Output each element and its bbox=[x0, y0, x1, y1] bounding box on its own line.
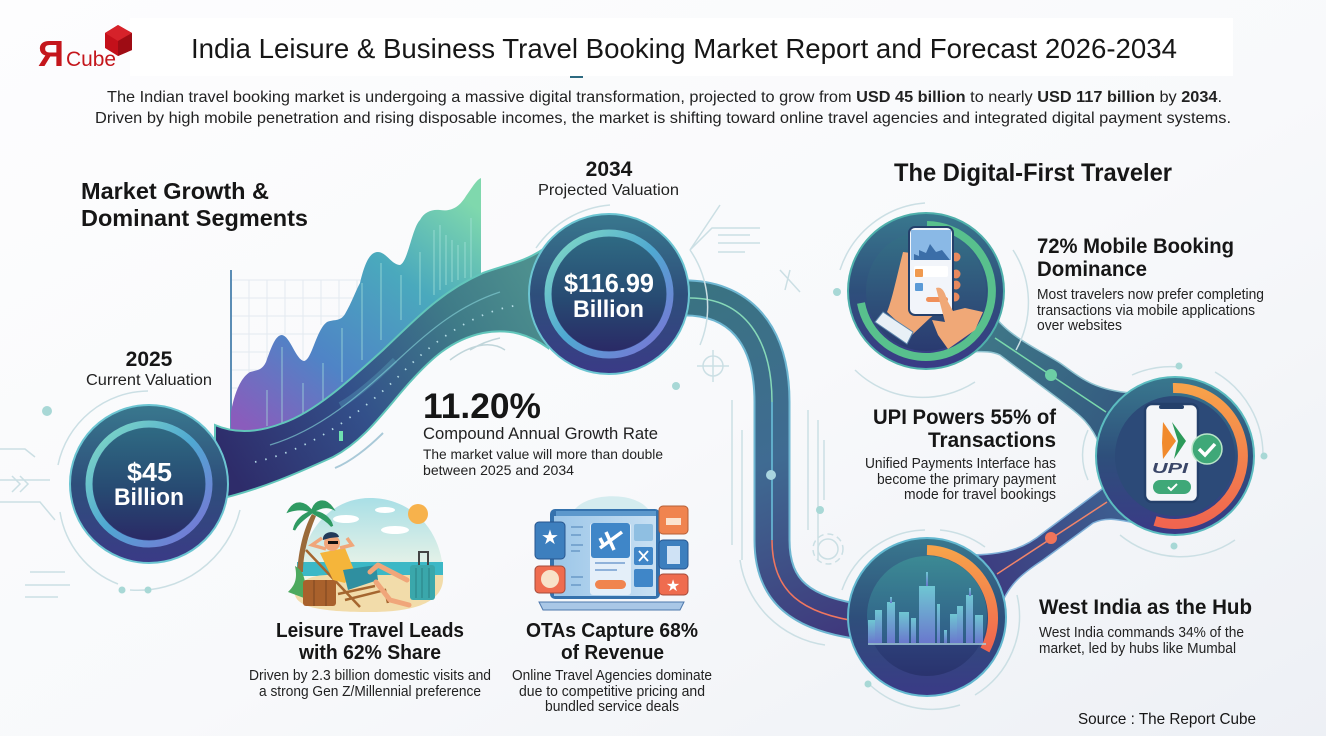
label: $116.99 Billion bbox=[564, 268, 654, 323]
icon: OTA laptop: ★ bbox=[541, 527, 559, 549]
heading: market growth: Dominant Segments bbox=[81, 205, 308, 231]
segment: OTAs: OTAs Capture 68% bbox=[526, 620, 698, 642]
intro text: Driven by high mobile penetration and rising disposable incomes, the market is shifting toward online travel agencies and integrated digital payment systems. bbox=[95, 110, 1231, 127]
logo: RCube: Cube bbox=[66, 48, 116, 71]
icon: beach traveller bbox=[288, 498, 443, 612]
label: $116.99 Billion: Billion bbox=[573, 296, 644, 323]
road: 2025 to 2034 bbox=[215, 248, 548, 500]
text: mobile booking bbox=[1037, 235, 1264, 334]
label: 2025 current valuation: 2025 bbox=[126, 348, 173, 371]
label: $45 Billion: $45 bbox=[127, 457, 172, 487]
text: UPI bbox=[865, 406, 1057, 503]
segment: leisure travel: with 62% Share bbox=[298, 642, 441, 664]
heading: market growth: Market Growth & bbox=[81, 178, 269, 204]
CAGR callout: 11.20% bbox=[423, 387, 541, 426]
text: UPI: Transactions bbox=[928, 429, 1056, 452]
text: West India: West India commands 34% of the bbox=[1039, 625, 1244, 641]
label: 2034 projected valuation bbox=[538, 158, 679, 199]
segment: leisure travel bbox=[249, 620, 491, 700]
segment: OTAs: due to competitive pricing and bbox=[519, 684, 705, 700]
label: 2034 projected valuation: Projected Valuation bbox=[538, 182, 679, 199]
segment: leisure travel: Leisure Travel Leads bbox=[276, 620, 464, 642]
circle: 2025 value bbox=[70, 405, 228, 563]
segment: leisure travel: Driven by 2.3 billion domestic visits and bbox=[249, 668, 491, 684]
logo: RCube: Я bbox=[38, 33, 64, 74]
text: UPI: Unified Payments Interface has bbox=[865, 456, 1056, 472]
text: UPI: UPI Powers 55% of bbox=[873, 406, 1057, 429]
road: 2034 to West India bbox=[680, 298, 862, 622]
circle: UPI icon: UPI bbox=[1152, 460, 1189, 477]
label: $116.99 Billion: $116.99 bbox=[564, 268, 654, 298]
label: 2034 projected valuation: 2034 bbox=[586, 158, 633, 181]
text: UPI: mode for travel bookings bbox=[904, 487, 1056, 503]
CAGR callout bbox=[423, 387, 663, 478]
heading: market growth bbox=[81, 178, 308, 231]
text: West India bbox=[1039, 596, 1252, 657]
text: mobile booking: Dominance bbox=[1037, 258, 1147, 281]
text: mobile booking: transactions via mobile applications bbox=[1037, 303, 1255, 319]
circle: 2034 value bbox=[529, 214, 689, 374]
text: UPI: become the primary payment bbox=[877, 472, 1056, 488]
heading: digital-first traveler: The Digital-First Traveler bbox=[894, 159, 1172, 187]
label: $45 Billion: Billion bbox=[114, 484, 184, 511]
label: 2025 current valuation bbox=[86, 348, 212, 389]
chart: growth area bbox=[231, 178, 481, 432]
road: UPI to West India bbox=[968, 486, 1142, 612]
circle: West India skyline bbox=[848, 538, 1006, 696]
segment: OTAs bbox=[512, 620, 712, 715]
text: West India: West India as the Hub bbox=[1039, 596, 1252, 619]
label: $45 Billion bbox=[114, 457, 184, 511]
text: mobile booking: Most travelers now prefer completing bbox=[1037, 287, 1264, 303]
icon: OTA laptop: ★ bbox=[666, 578, 680, 595]
text: mobile booking: over websites bbox=[1037, 318, 1122, 334]
title: India Leisure & Business Travel Booking Market Report and Forecast 2026-2034 bbox=[191, 33, 1177, 64]
decorative circuits bbox=[0, 203, 1263, 709]
source: Source : The Report Cube bbox=[1078, 711, 1256, 728]
intro text bbox=[95, 89, 1231, 127]
CAGR callout: between 2025 and 2034 bbox=[423, 462, 574, 478]
circle: mobile booking icon bbox=[848, 213, 1004, 369]
icon: OTA laptop bbox=[535, 496, 688, 610]
label: 2025 current valuation: Current Valuation bbox=[86, 372, 212, 389]
text: mobile booking: 72% Mobile Booking bbox=[1037, 235, 1234, 258]
text: West India: market, led by hubs like Mumbal bbox=[1039, 641, 1236, 657]
CAGR callout: Compound Annual Growth Rate bbox=[423, 425, 658, 443]
segment: leisure travel: a strong Gen Z/Millennial preference bbox=[259, 684, 481, 700]
road: mobile to UPI bbox=[962, 312, 1132, 446]
logo: RCube bbox=[38, 25, 132, 74]
intro text: The Indian travel booking market is undergoing a massive digital transformation, projected to grow from USD 45 billion to nearly USD 117 billion by 2034. bbox=[107, 89, 1222, 106]
circle: UPI icon bbox=[1096, 377, 1254, 535]
segment: OTAs: of Revenue bbox=[561, 642, 664, 664]
segment: OTAs: bundled service deals bbox=[545, 699, 679, 715]
CAGR callout: The market value will more than double bbox=[423, 446, 663, 462]
segment: OTAs: Online Travel Agencies dominate bbox=[512, 668, 712, 684]
